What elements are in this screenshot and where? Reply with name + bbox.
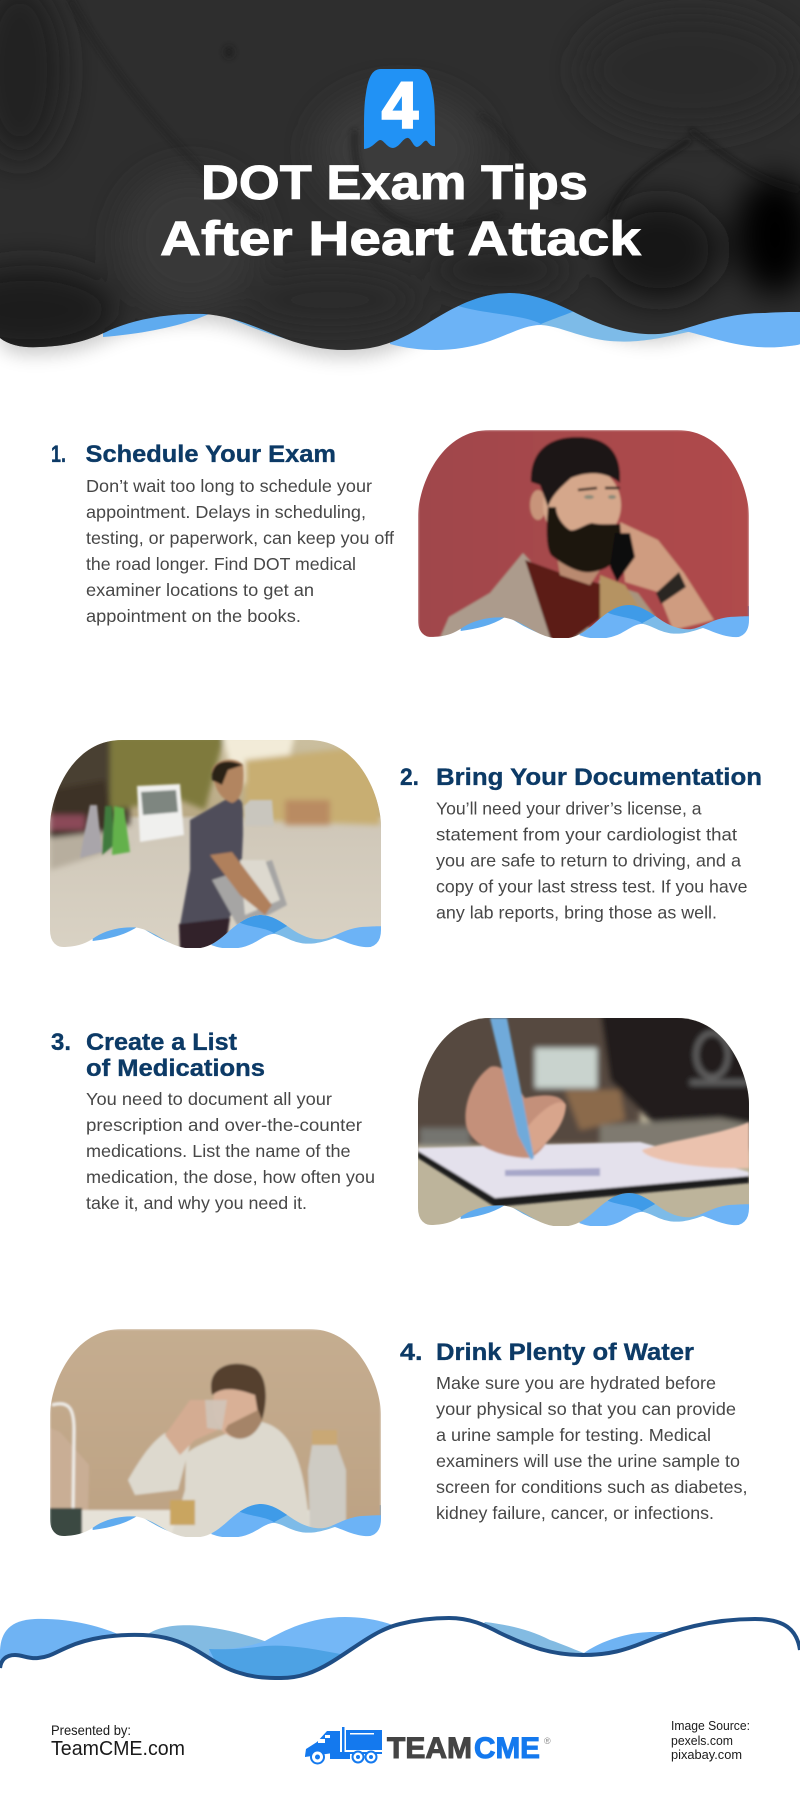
heading: schedule your exam: 1. (51, 441, 66, 468)
header background photo: chest and hands (0, 0, 800, 360)
image source credits (671, 1719, 750, 1762)
body text: tip 2: copy of your last stress test. If you have (436, 876, 748, 896)
heading: schedule your exam: Schedule Your Exam (86, 441, 336, 468)
heading: bring your documentation: Bring Your Documentation (436, 764, 762, 791)
heading: create a list of medications: 3. (51, 1029, 71, 1056)
presented by (51, 1722, 185, 1760)
body text: tip 1: Don’t wait too long to schedule your (86, 476, 372, 496)
body text: tip 3 (86, 1089, 375, 1213)
body text: tip 1: the road longer. Find DOT medical (86, 554, 356, 574)
body text: tip 2 (436, 798, 748, 922)
heading: create a list of medications: Create a List (86, 1029, 237, 1056)
body text: tip 3: prescription and over-the-counter (86, 1115, 362, 1135)
body text: tip 2: you are safe to return to driving, and a (436, 850, 741, 870)
presented by: TeamCME.com (51, 1738, 185, 1760)
body text: tip 3: medication, the dose, how often you (86, 1167, 375, 1187)
header panel (0, 0, 800, 360)
title: After Heart Attack (160, 213, 641, 266)
body text: tip 2: any lab reports, bring those as well. (436, 902, 717, 922)
body text: tip 3: You need to document all your (86, 1089, 332, 1109)
logo: TeamCME truck and wordmark: CME (474, 1732, 540, 1765)
body text: tip 4 (436, 1373, 748, 1523)
panel: tip 4 (50, 1329, 748, 1540)
title: DOT Exam Tips (201, 157, 588, 210)
panel: tip 3 (51, 1010, 755, 1228)
body text: tip 2: You’ll need your driver’s license, a (436, 798, 702, 818)
body text: tip 4: Make sure you are hydrated before (436, 1373, 716, 1393)
photo: man crossing a street with documents (50, 735, 381, 950)
heading: bring your documentation: 2. (400, 764, 419, 791)
body text: tip 3: take it, and why you need it. (86, 1193, 307, 1213)
logo: TeamCME truck and wordmark: TEAM (387, 1732, 472, 1765)
body text: tip 4: examiners will use the urine sample to (436, 1451, 740, 1471)
body text: tip 2: statement from your cardiologist that (436, 824, 737, 844)
heading: create a list of medications (51, 1029, 265, 1082)
heading: drink plenty of water: Drink Plenty of Water (436, 1339, 694, 1366)
badge: number 4: 4 (382, 68, 418, 142)
body text: tip 1 (86, 476, 394, 626)
footer panel (0, 1617, 800, 1818)
logo: TeamCME truck and wordmark (305, 1727, 551, 1765)
title (160, 157, 641, 266)
footer wave (0, 1617, 800, 1818)
badge: number 4 (364, 68, 435, 149)
photo: man drinking a glass of water (50, 1329, 381, 1540)
image source credits: Image Source: (671, 1719, 750, 1733)
icon: truck (305, 1727, 382, 1764)
body text: tip 1: examiner locations to get an (86, 580, 314, 600)
body text: tip 1: appointment on the books. (86, 606, 301, 626)
body text: tip 4: a urine sample for testing. Medical (436, 1425, 711, 1445)
header drop shadow (0, 0, 800, 358)
heading: drink plenty of water: 4. (400, 1339, 422, 1366)
body text: tip 3: medications. List the name of the (86, 1141, 350, 1161)
body text: tip 1: appointment. Delays in scheduling, (86, 502, 366, 522)
body text: tip 4: screen for conditions such as diabetes, (436, 1477, 748, 1497)
logo: TeamCME truck and wordmark: ® (544, 1736, 551, 1746)
heading: create a list of medications: of Medications (86, 1055, 265, 1082)
image source credits: pexels.com (671, 1734, 733, 1748)
image source credits: pixabay.com (671, 1748, 742, 1762)
body text: tip 1: testing, or paperwork, can keep you off (86, 528, 394, 548)
photo: hand writing in a notebook (410, 1010, 755, 1228)
header wave: blue layers (103, 280, 800, 350)
panel: tip 2 (50, 735, 762, 950)
photo: man on the phone (418, 430, 749, 640)
panel: tip 1 (51, 430, 749, 640)
presented by: Presented by: (51, 1722, 131, 1738)
body text: tip 4: your physical so that you can provide (436, 1399, 736, 1419)
body text: tip 4: kidney failure, cancer, or infections. (436, 1503, 714, 1523)
